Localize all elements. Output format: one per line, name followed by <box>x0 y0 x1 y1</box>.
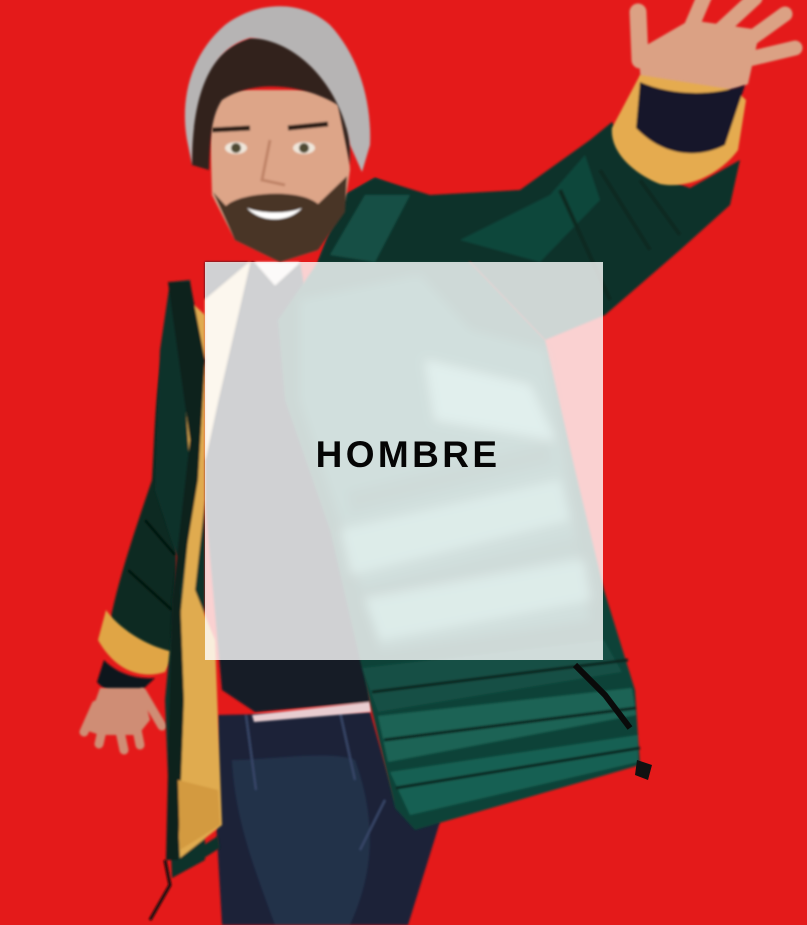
head: hair <box>190 37 350 170</box>
legs: jeans <box>216 712 440 925</box>
jacket body <box>278 178 640 830</box>
head: face <box>209 90 350 262</box>
left cuff <box>97 610 175 694</box>
jacket pocket zip and tag <box>575 665 652 780</box>
yellow cuff <box>612 75 746 185</box>
sweater and tee <box>205 262 371 722</box>
jacket highlights behind panel <box>300 275 592 650</box>
jacket left panel and lining <box>150 280 222 920</box>
raised hand <box>638 0 795 97</box>
heading: HOMBRE: HOMBRE <box>316 434 500 475</box>
head: hat <box>185 6 370 172</box>
translucent white panel <box>205 262 603 660</box>
left arm sleeve <box>110 345 178 655</box>
outstretched sleeve <box>318 122 740 340</box>
left hand <box>84 688 162 750</box>
